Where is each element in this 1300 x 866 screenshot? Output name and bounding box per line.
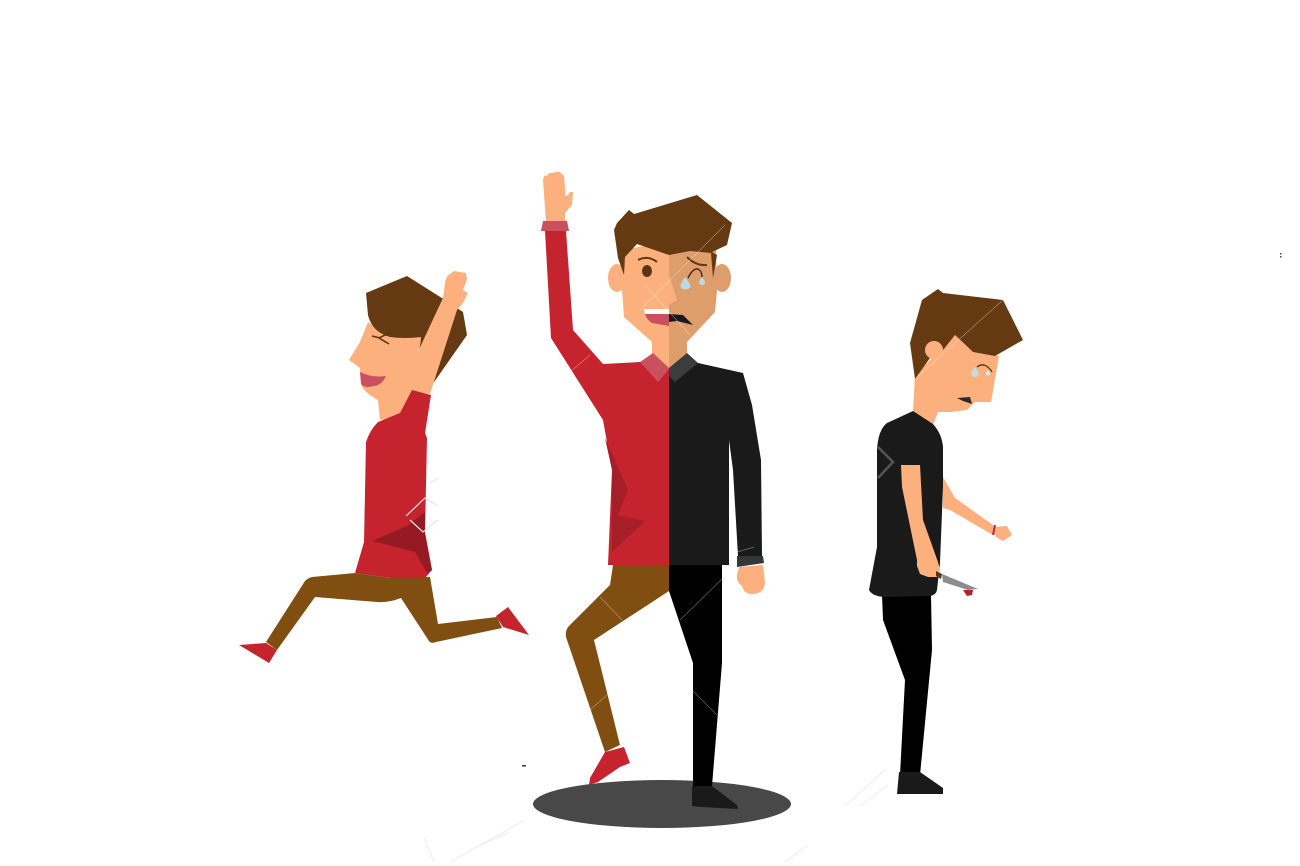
center black shoe bbox=[692, 786, 738, 809]
center raised hand bbox=[543, 172, 573, 222]
center hair bbox=[614, 195, 732, 278]
center shirt shadow bbox=[605, 438, 645, 552]
left figure back hair bbox=[418, 298, 467, 385]
left figure eye bbox=[372, 333, 389, 344]
center cuff bbox=[541, 221, 569, 231]
center face bbox=[622, 240, 717, 342]
center sleeve cuff bbox=[737, 556, 764, 567]
center black half of shirt bbox=[669, 363, 762, 565]
center fist bbox=[737, 565, 765, 594]
left figure hair bbox=[366, 276, 445, 353]
right figure wristband bbox=[993, 525, 995, 535]
faint stock watermarks at bottom bbox=[424, 770, 888, 862]
left figure shirt bbox=[355, 390, 432, 578]
left figure: happy jumping man bbox=[239, 271, 529, 663]
right figure mouth bbox=[957, 397, 972, 404]
right figure back fist bbox=[995, 526, 1012, 541]
center collar black bbox=[669, 353, 698, 382]
right figure front arm and hand bbox=[901, 465, 940, 577]
left figure raised arm bbox=[412, 271, 468, 394]
center black trouser leg bbox=[669, 565, 722, 786]
right figure watermark line bbox=[915, 300, 1003, 379]
right figure back arm bbox=[943, 477, 1000, 535]
center mouth bbox=[644, 309, 693, 326]
right figure trousers bbox=[882, 595, 932, 775]
left figure trousers bbox=[266, 573, 502, 650]
right figure eye and tears bbox=[971, 365, 992, 377]
left figure mouth bbox=[360, 372, 386, 387]
right figure ear bbox=[925, 341, 943, 359]
right figure shirt watermark bbox=[878, 447, 893, 478]
center left eye and brow bbox=[638, 258, 657, 277]
center watermark lines bbox=[570, 225, 754, 715]
center neck bbox=[652, 335, 687, 370]
right figure face and neck bbox=[913, 335, 999, 425]
left figure face bbox=[349, 322, 422, 420]
center red half of shirt bbox=[545, 231, 669, 565]
center figure: half happy half sad man bbox=[541, 172, 765, 809]
center ears bbox=[608, 264, 731, 292]
left figure watermark bbox=[406, 478, 438, 532]
left figure back shoe bbox=[239, 643, 277, 663]
right figure knife bbox=[936, 571, 978, 596]
center collar red bbox=[640, 353, 669, 382]
right figure hair bbox=[910, 289, 1023, 379]
center brown trouser leg bbox=[566, 565, 669, 752]
center red shoe bbox=[589, 747, 630, 785]
left figure front shoe bbox=[496, 607, 529, 635]
right figure shoe bbox=[897, 772, 943, 794]
right figure shirt bbox=[869, 411, 943, 597]
left figure shirt shadow bbox=[372, 512, 432, 573]
center crying eye and tears bbox=[680, 257, 707, 290]
right figure: sad man with knife bbox=[869, 289, 1023, 794]
small specks bbox=[522, 253, 1282, 767]
ground shadow bbox=[533, 780, 791, 828]
